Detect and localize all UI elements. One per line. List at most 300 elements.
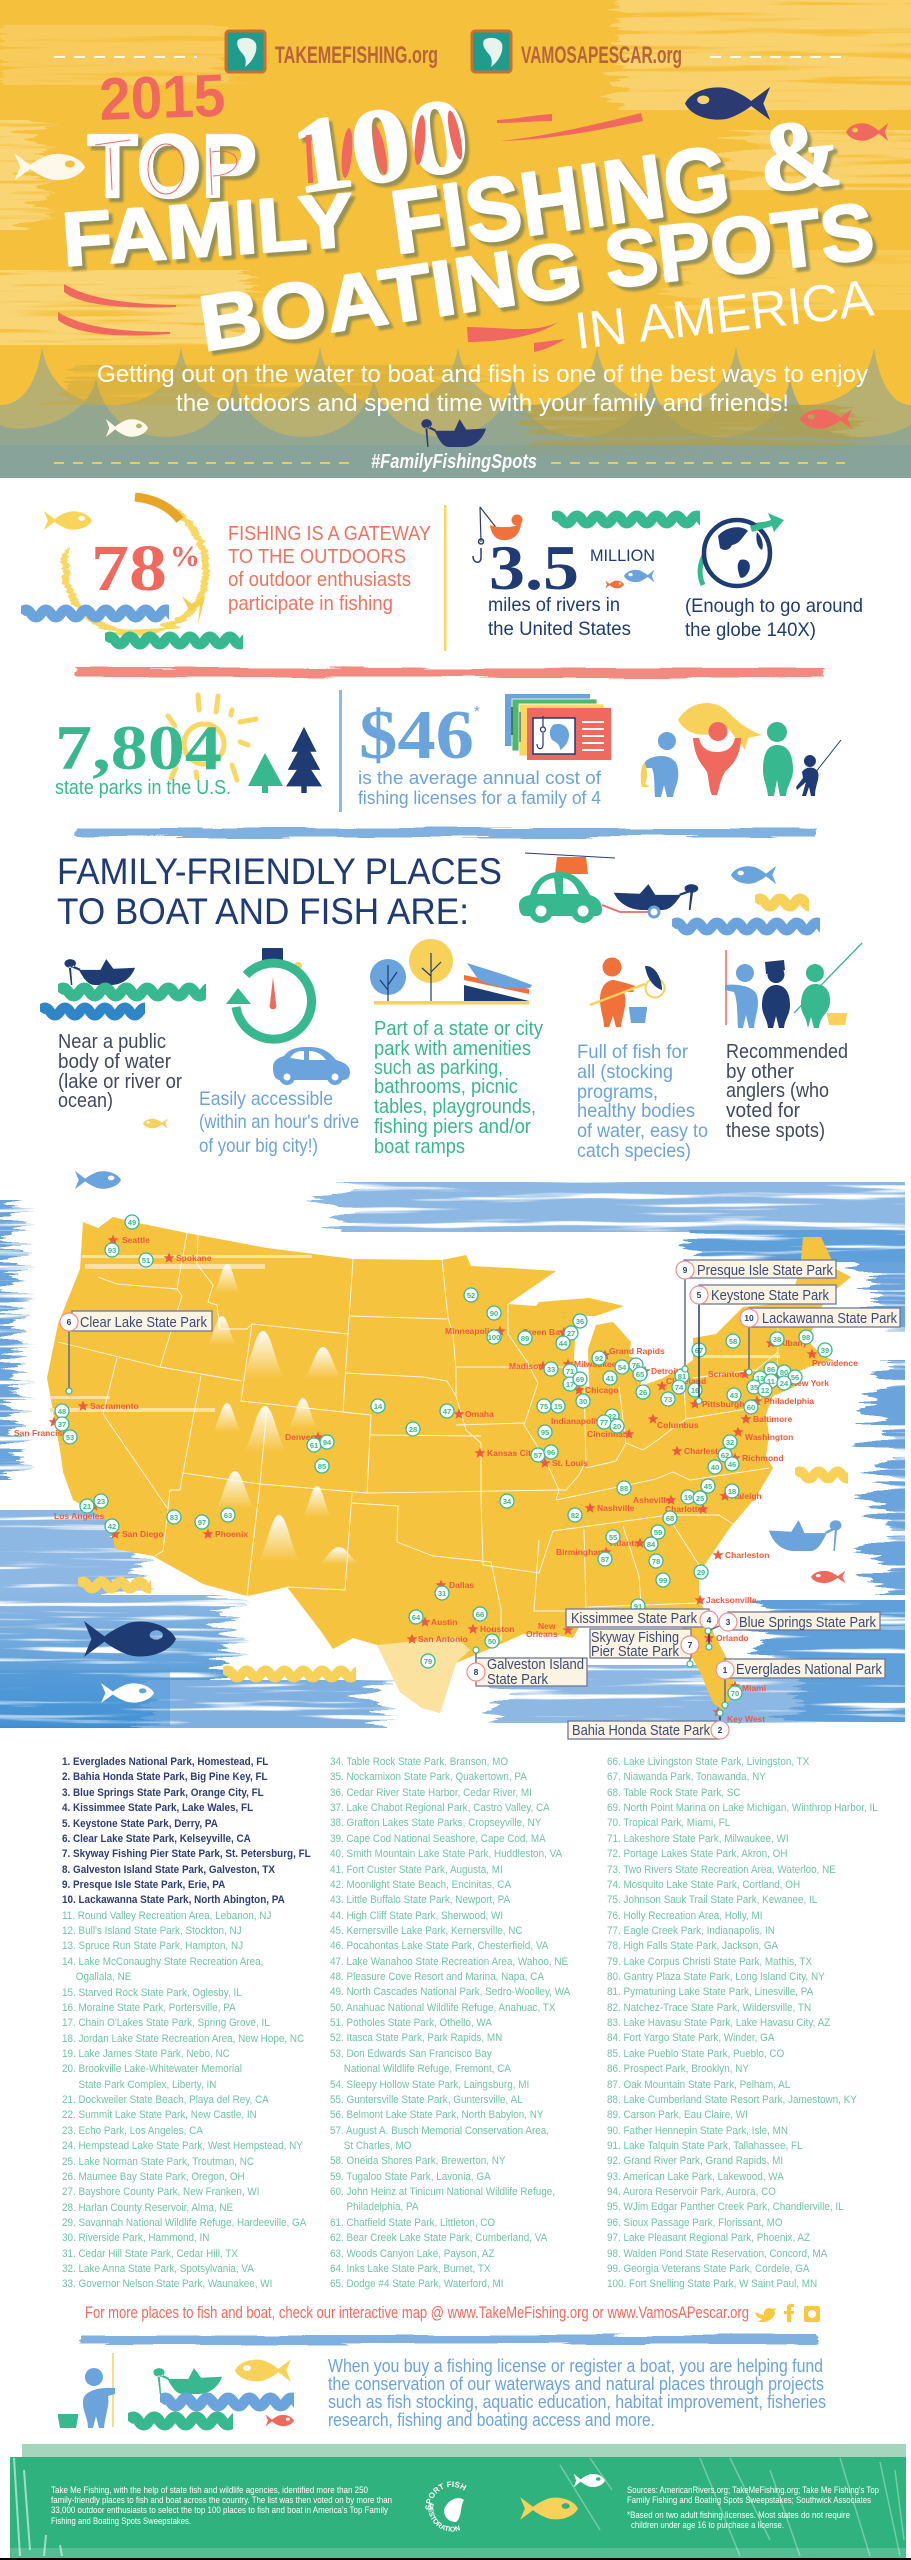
footer left text: family-friendly places to fish and boat across the country. The list was then voted on by more than xyxy=(51,2495,392,2506)
list: parks 34 to 65: 64. Inks Lake State Park, Burnet, TX xyxy=(330,2263,491,2275)
list: parks 34 to 65: 37. Lake Chabot Regional Park, Castro Valley, CA xyxy=(330,1802,550,1814)
city stars and labels: Green Bay xyxy=(522,1327,565,1337)
list: parks 1 to 33 xyxy=(62,1756,311,2290)
hero brush texture xyxy=(0,0,911,345)
logo: Sport Fish Restoration: SPORT FISH xyxy=(425,2481,466,2510)
list: parks 66 to 100: 98. Walden Pond State Reservation, Concord, MA xyxy=(607,2248,827,2260)
city stars and labels: Grand Rapids xyxy=(609,1346,665,1356)
text: Full of fish for xyxy=(577,1041,688,1063)
text xyxy=(58,1031,182,1112)
city stars and labels: Pittsburgh xyxy=(702,1399,744,1409)
wave: yellow bottom xyxy=(223,1670,525,1678)
coral swooshes xyxy=(58,113,643,352)
list: parks 66 to 100: 79. Lake Corpus Christi State Park, Mathis, TX xyxy=(607,1956,812,1968)
wave: blue xyxy=(160,2398,496,2406)
icon: green tree xyxy=(248,753,283,793)
city stars and labels: Orlando xyxy=(716,1633,749,1643)
fish: white xyxy=(574,2474,605,2487)
callout: Kissimmee State Park xyxy=(566,1609,718,1650)
text: anglers (who xyxy=(726,1080,829,1102)
callout: Keystone State Park xyxy=(690,1285,836,1404)
list: parks 66 to 100: 90. Father Hennepin State Park, Isle, MN xyxy=(607,2125,788,2137)
footer left text: 33,000 outdoor enthusiasts to select the top 100 places to fish and boat in America's Top Family xyxy=(51,2505,388,2516)
footer right text: *Based on two adult fishing licenses. Most states do not require xyxy=(627,2510,850,2521)
text: all (stocking xyxy=(577,1061,673,1083)
number $46: $46 xyxy=(359,697,474,774)
list: parks 1 to 33: 26. Maumee Bay State Park, Oregon, OH xyxy=(62,2171,245,2183)
list: parks 66 to 100: 100. Fort Snelling State Park, W Saint Paul, MN xyxy=(607,2278,817,2290)
list: parks 66 to 100: 68. Table Rock State Park, SC xyxy=(607,1787,741,1799)
city stars and labels: Scranton xyxy=(708,1369,745,1379)
list: parks 66 to 100: 92. Grand River Park, Grand Rapids, MI xyxy=(607,2155,783,2167)
numbered park pins: 81 xyxy=(678,1372,686,1381)
numbered park pins: 18 xyxy=(728,1487,736,1496)
numbered park pins: 77 xyxy=(600,1418,608,1427)
list: parks 1 to 33: 14. Lake McConaughy State Recreation Area, xyxy=(62,1956,263,1968)
callout: Clear Lake State Park: Clear Lake State Park xyxy=(80,1314,207,1331)
list: parks 66 to 100: 77. Eagle Creek Park, Indianapolis, IN xyxy=(607,1925,775,1937)
list: parks 66 to 100: 71. Lakeshore State Park, Milwaukee, WI xyxy=(607,1833,789,1845)
heading xyxy=(57,851,502,932)
city stars and labels xyxy=(14,1234,858,1724)
list: parks 34 to 65: 41. Fort Custer State Park, Augusta, MI xyxy=(330,1864,503,1876)
panel: hero banner xyxy=(0,0,911,478)
numbered park pins: 44 xyxy=(559,1339,568,1348)
callout: Keystone State Park: Keystone State Park xyxy=(711,1287,829,1304)
text: by other xyxy=(726,1061,794,1083)
list: parks 34 to 65: 55. Guntersville State Park, Guntersville, AL xyxy=(330,2094,523,2106)
dashes beside logos xyxy=(54,56,845,58)
icon: globe xyxy=(700,513,784,586)
numbered park pins: 14 xyxy=(374,1402,383,1411)
fish: navy large xyxy=(84,1621,176,1657)
fish: blue xyxy=(731,866,776,884)
fish: white in water xyxy=(106,419,148,437)
city stars and labels: Cincinnati xyxy=(587,1429,628,1439)
city stars and labels: Charleston xyxy=(725,1550,769,1560)
item: recommended xyxy=(725,943,862,1142)
city stars and labels: Jacksonville xyxy=(706,1595,757,1605)
list: parks 66 to 100: 82. Natchez-Trace State Park, Wildersville, TN xyxy=(607,2002,811,2014)
footer left text xyxy=(51,2485,392,2527)
license text xyxy=(358,767,602,808)
icon: family xyxy=(641,703,841,797)
wave: green xyxy=(105,637,424,644)
numbered park pins: 85 xyxy=(318,1462,326,1471)
numbered park pins: 91 xyxy=(634,1602,642,1611)
divider: blue vertical xyxy=(339,690,342,812)
rivers text: the United States xyxy=(488,618,631,640)
numbered park pins: 97 xyxy=(198,1518,206,1527)
list: parks 34 to 65: 51. Potholes State Park, Othello, WA xyxy=(330,2017,492,2029)
numbered park pins: 39 xyxy=(821,1346,829,1355)
icon: social media xyxy=(755,2304,820,2322)
panel: footer xyxy=(10,2444,906,2558)
percent sign: % xyxy=(170,540,200,573)
numbered park pins: 68 xyxy=(666,1514,674,1523)
conservation text: When you buy a fishing license or register a boat, you are helping fund xyxy=(328,2356,823,2376)
numbered park pins: 100 xyxy=(488,1333,500,1342)
city stars and labels: Charleston xyxy=(684,1446,728,1456)
numbered park pins: 94 xyxy=(323,1438,332,1447)
title: TOP: TOP xyxy=(87,117,257,217)
ring arrowhead xyxy=(182,596,205,625)
callout: Presque Isle State Park xyxy=(676,1260,836,1372)
title: FISHING: FISHING xyxy=(385,127,735,274)
list: parks 1 to 33: 2. Bahia Honda State Park, Big Pine Key, FL xyxy=(62,1771,268,1783)
city stars and labels: Baltimore xyxy=(753,1414,792,1424)
fish: coral in water xyxy=(800,409,852,429)
panel: state parks stat xyxy=(55,695,322,799)
callout: Skyway Fishing Pier State Park: 7 xyxy=(688,1640,693,1650)
city stars and labels: Seattle xyxy=(122,1235,150,1245)
stat text: of outdoor enthusiasts xyxy=(228,569,411,591)
fish: coral xyxy=(266,2415,294,2426)
list: parks 34 to 65: 44. High Cliff State Park, Sherwood, WI xyxy=(330,1910,503,1922)
numbered park pins: 34 xyxy=(503,1497,512,1506)
panel: 78 percent stat xyxy=(21,497,431,644)
boat: navy xyxy=(421,419,486,447)
city stars and labels: Austin xyxy=(431,1617,457,1627)
city stars and labels: Los Angeles xyxy=(54,1511,104,1521)
stat text xyxy=(228,523,431,615)
city stars and labels: Chicago xyxy=(585,1385,619,1395)
callout: Everglades National Park: 1 xyxy=(723,1665,728,1675)
numbered park pins: 75 xyxy=(540,1402,548,1411)
city stars and labels: Sacramento xyxy=(90,1401,139,1411)
list: parks 34 to 65: 35. Nockamixon State Park, Quakertown, PA xyxy=(330,1771,527,1783)
icon: angler in boat xyxy=(473,507,522,562)
text: ocean) xyxy=(58,1090,113,1112)
item: near water xyxy=(40,959,394,1112)
city stars and labels: Washington xyxy=(745,1432,793,1442)
TOP 100 inline details xyxy=(95,110,465,195)
numbered park pins: 13 xyxy=(756,1374,764,1383)
heading: TO BOAT AND FISH ARE: xyxy=(57,891,469,932)
list: parks 66 to 100: 99. Georgia Veterans State Park, Cordele, GA xyxy=(607,2263,810,2275)
callout: Skyway Fishing Pier State Park xyxy=(590,1629,699,1667)
numbered park pins: 56 xyxy=(791,1373,799,1382)
list: parks 34 to 65: Philadelphia, PA xyxy=(346,2201,418,2213)
ring top accent xyxy=(135,497,180,520)
numbered park pins: 28 xyxy=(409,1425,417,1434)
conservation text xyxy=(328,2356,826,2430)
numbered park pins: 33 xyxy=(547,1365,555,1374)
list: parks 34 to 65: 34. Table Rock State Park, Branson, MO xyxy=(330,1756,508,1768)
logo: TakeMeFishing xyxy=(226,31,438,72)
callout: Kissimmee State Park: Kissimmee State Park xyxy=(571,1610,697,1627)
list: parks 34 to 65: 60. John Heinz at Tinicum National Wildlife Refuge, xyxy=(330,2186,555,2198)
icon: trailer wheel xyxy=(649,907,659,917)
numbered park pins: 32 xyxy=(726,1438,734,1447)
fish: coral right xyxy=(811,1571,845,1583)
text: (lake or river or xyxy=(58,1071,182,1093)
list: parks 1 to 33: 3. Blue Springs State Park, Orange City, FL xyxy=(62,1787,264,1799)
callout: Skyway Fishing Pier State Park: Pier State Park xyxy=(591,1643,679,1660)
water ochre streak xyxy=(60,365,860,455)
list: parks 66 to 100: 97. Lake Pleasant Regional Park, Phoenix, AZ xyxy=(607,2232,810,2244)
numbered park pins: 65 xyxy=(636,1370,644,1379)
number 7,804: 7,804 xyxy=(55,712,222,783)
list: parks 34 to 65: 52. Itasca State Park, Park Rapids, MN xyxy=(330,2032,502,2044)
wave: yellow xyxy=(755,899,911,906)
numbered park pins: 26 xyxy=(639,1388,647,1397)
list: parks 34 to 65: 58. Oneida Shores Park, Brewerton, NY xyxy=(330,2155,506,2167)
icon: navy tree xyxy=(286,727,322,793)
text: catch species) xyxy=(577,1140,691,1162)
icon: green boat xyxy=(153,2368,222,2394)
city stars and labels: Madison xyxy=(509,1361,543,1371)
list: parks 66 to 100: 75. Johnson Sauk Trail State Park, Kewanee, IL xyxy=(607,1894,817,1906)
list: parks 66 to 100: 94. Aurora Reservoir Park, Aurora, CO xyxy=(607,2186,776,2198)
title: ampersand: & xyxy=(753,98,845,214)
globe text xyxy=(685,595,863,641)
city stars and labels: St. Louis xyxy=(552,1458,588,1468)
list: parks 34 to 65: 40. Smith Mountain Lake State Park, Huddleston, VA xyxy=(330,1848,562,1860)
city stars and labels: New xyxy=(538,1621,556,1631)
list: parks 34 to 65: 46. Pocahontas Lake State Park, Chesterfield, VA xyxy=(330,1940,548,1952)
panel: US map xyxy=(0,1170,911,1740)
callout: Everglades National Park: Everglades National Park xyxy=(736,1661,882,1678)
callout: Blue Springs State Park: 3 xyxy=(726,1617,731,1627)
list: parks 1 to 33: 15. Starved Rock State Park, Oglesby, IL xyxy=(62,1987,242,1999)
logo: VamosAPescar: VAMOSAPESCAR.org xyxy=(521,42,682,69)
state lines xyxy=(58,1233,778,1641)
callout: Everglades National Park xyxy=(716,1659,885,1708)
item: accessible xyxy=(199,948,359,1157)
list: parks 34 to 65: 45. Kernersville Lake Park, Kernersville, NC xyxy=(330,1925,523,1937)
text: Part of a state or city xyxy=(374,1018,543,1040)
list: parks 66 to 100: 89. Carson Park, Eau Claire, WI xyxy=(607,2109,748,2121)
ring brush stroke xyxy=(65,497,206,632)
numbered park pins: 53 xyxy=(66,1433,74,1442)
title: SPOTS: SPOTS xyxy=(600,186,878,305)
text: Near a public xyxy=(58,1031,166,1053)
list: parks 34 to 65: 48. Pleasure Cove Resort and Marina, Napa, CA xyxy=(330,1971,544,1983)
list: parks 1 to 33: 22. Summit Lake State Park, New Castle, IN xyxy=(62,2109,257,2121)
list: parks 1 to 33: 6. Clear Lake State Park, Kelseyville, CA xyxy=(62,1833,251,1845)
text: boat ramps xyxy=(374,1136,465,1158)
panel: family-friendly places xyxy=(40,851,911,1189)
text: programs, xyxy=(577,1081,658,1103)
list: parks 1 to 33: State Park Complex, Liberty, IN xyxy=(78,2079,216,2091)
numbered park pins: 79 xyxy=(424,1657,432,1666)
numbered park pins: 66 xyxy=(476,1610,484,1619)
numbered park pins: 87 xyxy=(601,1555,609,1564)
intro text: the outdoors and spend time with your family and friends! xyxy=(176,390,789,417)
text: body of water xyxy=(58,1051,171,1073)
logo: TakeMeFishing: TAKEMEFISHING.org xyxy=(275,42,438,69)
city stars and labels: Atlanta xyxy=(610,1538,639,1548)
numbered park pins: 40 xyxy=(711,1463,719,1472)
list: parks 34 to 65: 57. August A. Busch Memorial Conservation Area, xyxy=(330,2125,549,2137)
city stars and labels: Cleveland xyxy=(666,1376,706,1386)
numbered park pins: 93 xyxy=(108,1246,116,1255)
list: parks 66 to 100: 85. Lake Pueblo State Park, Pueblo, CO xyxy=(607,2048,784,2060)
list: parks 1 to 33: 11. Round Valley Recreation Area, Lebanon, NJ xyxy=(62,1910,271,1922)
city stars and labels: Spokane xyxy=(176,1253,212,1263)
city stars and labels: Phoenix xyxy=(215,1529,248,1539)
fish: small yellow xyxy=(143,1119,168,1128)
numbered park pins: 11 xyxy=(767,1377,775,1386)
city stars and labels: Raleigh xyxy=(731,1491,762,1501)
fish: white left xyxy=(14,154,85,180)
icon: sun xyxy=(168,695,256,780)
footer left text: Fishing and Boating Spots Sweepstakes. xyxy=(51,2516,191,2527)
south Texas lighter area xyxy=(377,1637,470,1713)
numbered park pins: 61 xyxy=(310,1441,318,1450)
city stars and labels: Key West xyxy=(727,1714,765,1724)
list: parks 1 to 33: 28. Harlan County Reservoir, Alma, NE xyxy=(62,2202,233,2214)
conservation text: the conservation of our waterways and natural places through projects xyxy=(328,2374,824,2394)
text: fishing piers and/or xyxy=(374,1116,531,1138)
numbered park pins: 38 xyxy=(773,1335,781,1344)
city stars and labels: Denver xyxy=(285,1432,315,1442)
numbered park pins: 55 xyxy=(609,1533,617,1542)
icon: cooler on car xyxy=(555,857,588,874)
icon: green bucket xyxy=(58,2414,78,2428)
numbered park pins: 52 xyxy=(467,1291,475,1300)
title: IN AMERICA: IN AMERICA xyxy=(572,269,877,361)
numbered park pins: 57 xyxy=(534,1451,542,1460)
numbered park pins: 59 xyxy=(654,1528,662,1537)
text xyxy=(374,1018,543,1158)
city stars and labels: Orleans xyxy=(526,1629,558,1639)
stat text: TO THE OUTDOORS xyxy=(228,546,406,568)
list: parks 1 to 33: 17. Chain O'Lakes State Park, Spring Grove, IL xyxy=(62,2017,270,2029)
city stars and labels: Milwaukee xyxy=(574,1359,617,1369)
list: parks 34 to 65: 50. Anahuac National Wildlife Refuge, Anahuac, TX xyxy=(330,2002,555,2014)
rivers text xyxy=(488,594,631,640)
numbered park pins: 99 xyxy=(659,1576,667,1585)
numbered park pins: 54 xyxy=(618,1363,627,1372)
fish: small coral xyxy=(846,123,888,141)
numbered park pins: 31 xyxy=(438,1589,446,1598)
icon: stopwatch xyxy=(226,948,312,1039)
callout: Galveston Island State Park: 8 xyxy=(474,1667,479,1677)
yellow fish held overhead xyxy=(678,703,762,750)
panel: license cost stat xyxy=(358,694,841,808)
city stars and labels: Philadelphia xyxy=(764,1396,814,1406)
numbered park pins: 70 xyxy=(731,1689,739,1698)
divider: blue brush xyxy=(76,828,816,837)
title xyxy=(59,75,878,368)
numbered park pins: 48 xyxy=(58,1407,66,1416)
callout: Galveston Island State Park: Galveston Island xyxy=(487,1656,584,1673)
numbered park pins: 46 xyxy=(728,1460,736,1469)
list: parks 1 to 33: 7. Skyway Fishing Pier State Park, St. Petersburg, FL xyxy=(62,1848,311,1860)
intro text: Getting out on the water to boat and fish is one of the best ways to enjoy xyxy=(97,361,868,388)
numbered park pins: 43 xyxy=(730,1391,738,1400)
footer right text xyxy=(627,2485,879,2531)
list: parks 1 to 33: 29. Savannah National Wildlife Refuge, Hardeeville, GA xyxy=(62,2217,306,2229)
list: parks 66 to 100: 96. Sioux Passage Park, Florissant, MO xyxy=(607,2217,783,2229)
numbered park pins: 86 xyxy=(767,1365,775,1374)
text: (within an hour's drive xyxy=(199,1111,359,1133)
list: parks 66 to 100: 67. Niawanda Park, Tonawanda, NY xyxy=(607,1771,766,1783)
divider: coral brush xyxy=(76,668,824,677)
callout: Blue Springs State Park xyxy=(705,1612,880,1634)
list: parks 1 to 33: 9. Presque Isle State Park, Erie, PA xyxy=(62,1879,225,1891)
callout: Skyway Fishing Pier State Park: Skyway Fishing xyxy=(591,1629,679,1646)
city stars and labels: Providence xyxy=(812,1358,858,1368)
waves: front row xyxy=(0,377,911,478)
list: parks 1 to 33: 25. Lake Norman State Park, Troutman, NC xyxy=(62,2156,254,2168)
list: parks 34 to 65: 54. Sleepy Hollow State Park, Laingsburg, MI xyxy=(330,2079,529,2091)
numbered park pins: 71 xyxy=(566,1367,574,1376)
list: parks 66 to 100: 91. Lake Talquin State Park, Tallahassee, FL xyxy=(607,2140,803,2152)
numbered park pins: 58 xyxy=(729,1337,737,1346)
text xyxy=(199,1088,359,1157)
numbered park pins: 16 xyxy=(691,1386,699,1395)
callout: Lackawanna State Park xyxy=(740,1308,900,1375)
bottom edge bar xyxy=(0,2558,911,2560)
list: parks 34 to 65: 56. Belmont Lake State Park, North Babylon, NY xyxy=(330,2109,544,2121)
icon: rod xyxy=(112,2353,114,2427)
list: parks 66 to 100: 73. Two Rivers State Recreation Area, Waterloo, NE xyxy=(607,1864,836,1876)
footer lower band xyxy=(10,2548,906,2558)
list: parks 66 to 100: 80. Gantry Plaza State Park, Long Island City, NY xyxy=(607,1971,825,1983)
wave: green top xyxy=(552,516,871,523)
number 3.5: 3.5 xyxy=(489,533,579,603)
numbered park pins: 78 xyxy=(652,1557,660,1566)
numbered park pins: 19 xyxy=(684,1493,692,1502)
numbered park pins: 42 xyxy=(108,1522,116,1531)
solid brush core lower left xyxy=(0,1670,170,1726)
callout: Presque Isle State Park: 9 xyxy=(683,1265,688,1275)
text xyxy=(577,1041,708,1162)
city stars and labels: Detroit xyxy=(651,1366,679,1376)
divider: yellow vertical xyxy=(444,505,446,651)
numbered park pins: 41 xyxy=(606,1374,614,1383)
list: parks 34 to 65: 43. Little Buffalo State Park, Newport, PA xyxy=(330,1894,510,1906)
list: parks 1 to 33: 5. Keystone State Park, Derry, PA xyxy=(62,1818,218,1830)
numbered park pins: 51 xyxy=(142,1256,150,1265)
numbered park pins: 83 xyxy=(170,1513,178,1522)
numbered park pins: 23 xyxy=(97,1497,105,1506)
icon: person with net xyxy=(590,958,664,1027)
conservation text: such as fish stocking, aquatic education, habitat improvement, fisheries xyxy=(328,2392,826,2412)
waves: back row xyxy=(0,347,911,478)
callout: Blue Springs State Park: Blue Springs State Park xyxy=(739,1614,876,1631)
coral parent xyxy=(693,722,741,795)
city stars and labels: Dallas xyxy=(449,1580,474,1590)
fish: blue xyxy=(624,570,654,582)
asterisk: * xyxy=(474,703,480,720)
title: BOATING: BOATING xyxy=(194,224,587,368)
list: parks 66 to 100: 72. Portage Lakes State Park, Akron, OH xyxy=(607,1848,788,1860)
callout: Presque Isle State Park: Presque Isle State Park xyxy=(697,1262,833,1279)
list: parks 1 to 33: 30. Riverside Park, Hammond, IN xyxy=(62,2232,209,2244)
icon: trailer hitch xyxy=(602,905,655,912)
text: healthy bodies xyxy=(577,1100,695,1122)
rivers text: miles of rivers in xyxy=(488,594,620,616)
city stars and labels: San Francisco xyxy=(14,1428,72,1438)
numbered park pins xyxy=(55,1215,832,1700)
numbered park pins: 67 xyxy=(695,1346,703,1355)
wave: blue xyxy=(40,1008,359,1015)
numbered park pins: 35 xyxy=(750,1383,758,1392)
land streaks xyxy=(50,1255,780,1412)
callout: Kissimmee State Park: 4 xyxy=(707,1615,712,1625)
text: such as parking, xyxy=(374,1057,503,1079)
MILLION: MILLION xyxy=(590,546,655,565)
callout: Keystone State Park: 5 xyxy=(697,1290,702,1300)
list: parks 34 to 65: 38. Grafton Lakes State Parks, Cropseyville, NY xyxy=(330,1817,541,1829)
stat text: participate in fishing xyxy=(228,593,393,615)
text: Recommended xyxy=(726,1041,848,1063)
callout: Clear Lake State Park xyxy=(60,1311,212,1394)
